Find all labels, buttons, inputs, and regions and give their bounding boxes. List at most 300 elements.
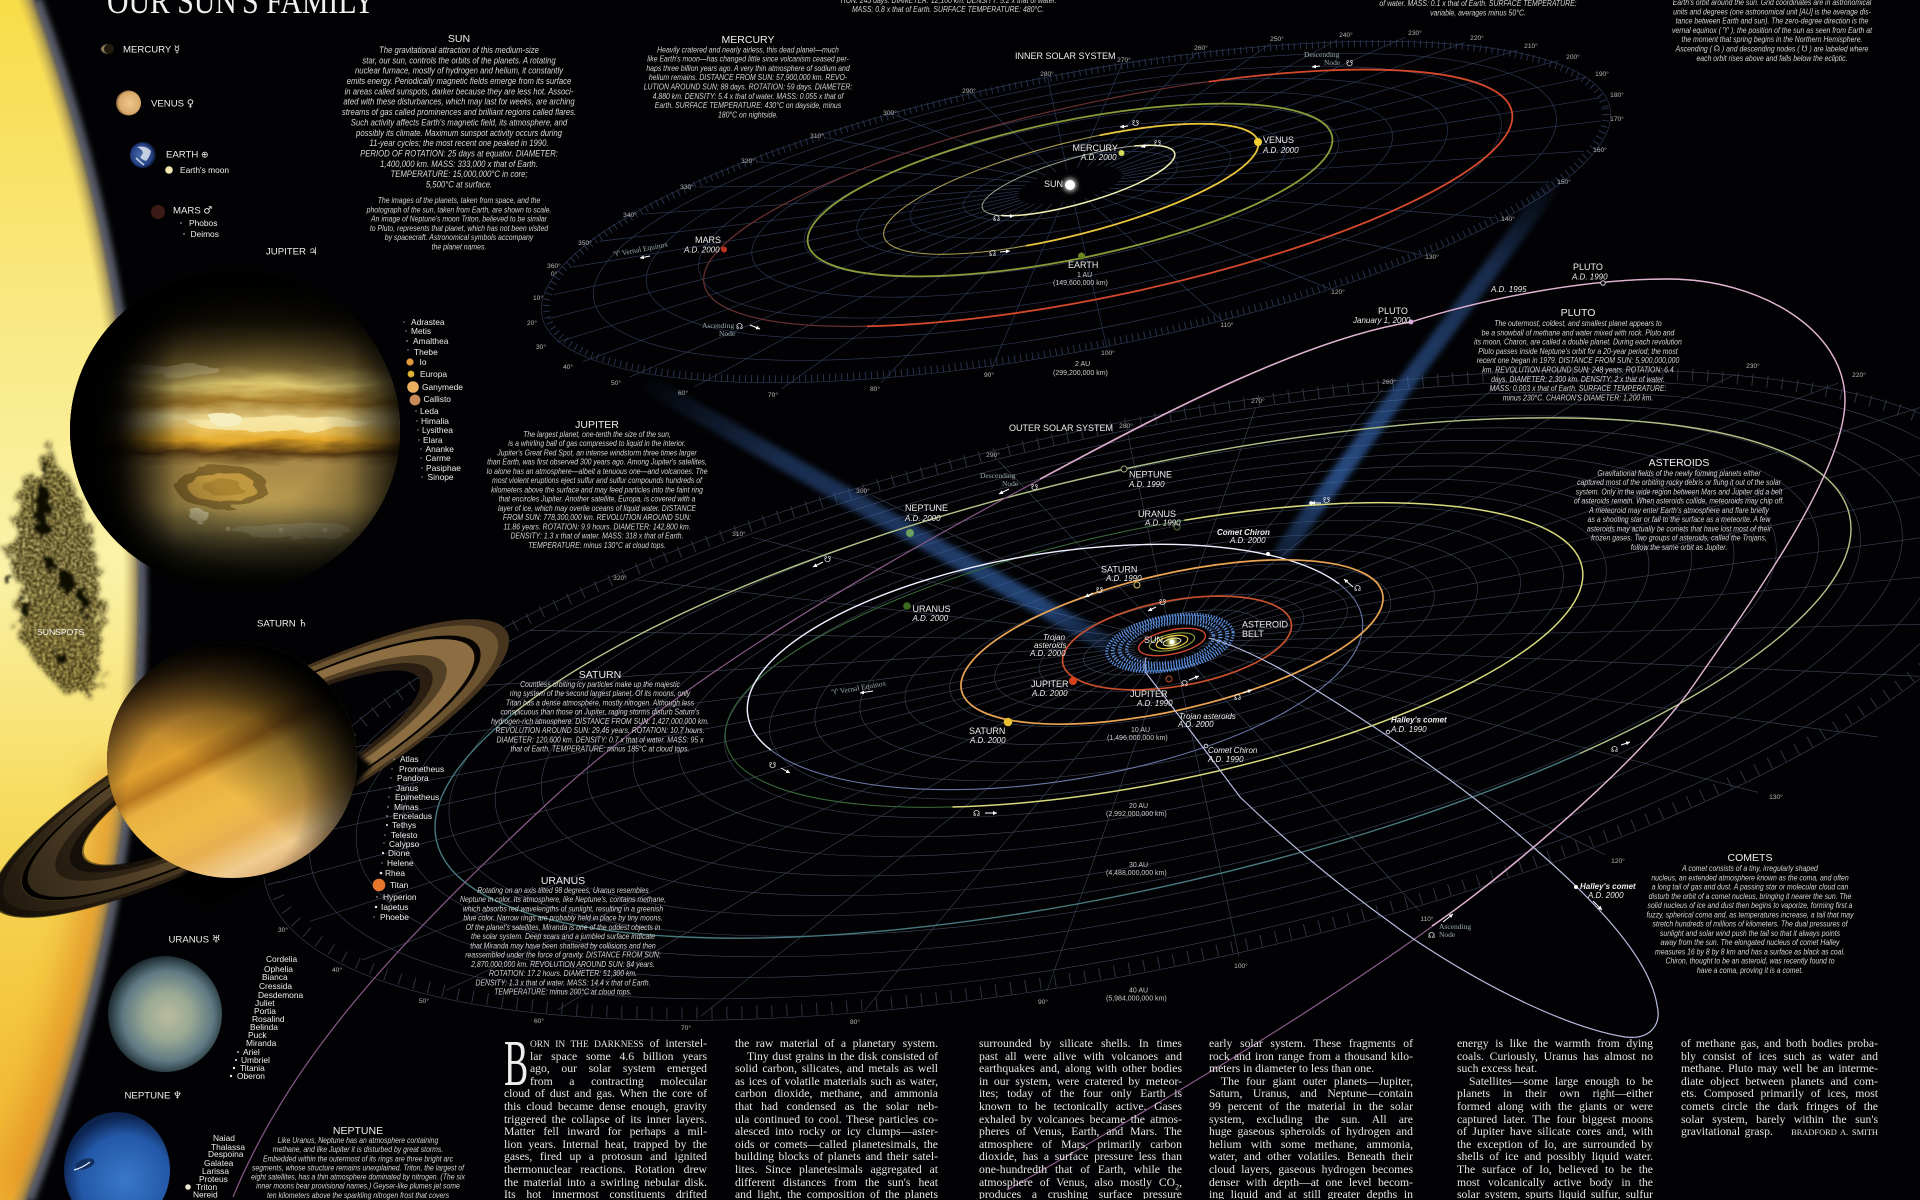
text: neptune [251, 1125, 466, 1200]
article column 1: thermonuclear reactions. Rotation drew [504, 1163, 707, 1176]
article column 1: ago, our solar system emerged [530, 1062, 707, 1075]
article column 5: most volcanically active body in the [1457, 1176, 1653, 1189]
text: venus (cropped) [839, 0, 1057, 14]
inner system labels: MARS [695, 235, 721, 245]
text: sun: Such activity affects Earth's magnetic field, its atmosphere, and [351, 117, 568, 128]
outer system labels: ☋ [1159, 598, 1166, 607]
text: comets: Chiron, thought to be an asteroid, was recently found to [1665, 956, 1835, 966]
article column 1 [504, 1038, 707, 1199]
inner system labels: ♈︎ Vernal Equinox [613, 240, 669, 259]
outer system degree labels: 90° [1038, 998, 1048, 1006]
text: sun: possibly its climate. Maximum sunspot activity occurs during [355, 127, 562, 138]
outer system labels: BELT [1242, 629, 1264, 639]
article column 3 [979, 1038, 1182, 1199]
text: uranus: the solar system. Deep scars and a jumbled surface indicate [471, 932, 655, 941]
miniature inner orbits and sun at outer-system centre [1132, 619, 1212, 665]
article column 4: meters in diameter to less than one. [1209, 1062, 1374, 1075]
outer system labels: 40 AU [1129, 988, 1148, 994]
inner system degree labels: 250° [1270, 35, 1284, 43]
outer system labels: Node [1002, 479, 1019, 488]
article column 1: this cloud became dense enough, gravity [504, 1100, 707, 1113]
text: uranus: which absorbs red wavelengths of sunlight, resulting in a greenish [463, 904, 663, 914]
saturn moons list: Rhea [385, 868, 405, 878]
inner system degree labels: 270° [1117, 56, 1131, 64]
article column 2: oids or comets—called planetesimals, the [735, 1138, 938, 1151]
text: sun: in areas called sunspots, darker because they are less hot. Associ- [345, 86, 574, 97]
text: sun: emits energy. Periodically magnetic fields emerge from its surface [347, 75, 572, 86]
planet: mercury [101, 44, 114, 54]
outer system labels: (2,992,000,000 km) [1106, 811, 1167, 818]
text: sun: 11-year cycles; the most recent one peaked in 1990. [369, 137, 549, 148]
neptune moons list: Naiad [213, 1133, 235, 1143]
outer system labels: A.D. 2000 [1229, 536, 1266, 545]
inner system labels: Node [719, 329, 736, 338]
planet name labels: JUPITER ♃ [266, 246, 318, 258]
text: asteroids: captured most of the orbiting rocky debris or flung it out of the solar [1577, 478, 1781, 487]
text: grid explanation [1672, 0, 1873, 63]
outer system labels: ☊ [1611, 745, 1618, 754]
text: uranus: Neptune in color. Its atmosphere, like Neptune's, contains methane, [460, 895, 666, 904]
inner system degree labels: 210° [1524, 42, 1538, 50]
article column 2: that had condensed as the solar neb- [735, 1100, 938, 1113]
planet: earth [130, 142, 156, 168]
jupiter moons list: Elara [423, 435, 443, 445]
orbit: mercury [976, 131, 1181, 230]
text: comets: disturb the orbit of a comet nucleus, bringing it nearer the sun. The [1649, 891, 1851, 901]
outer system labels: ASTEROID [1242, 620, 1289, 630]
outer system labels: 20 AU [1129, 803, 1148, 810]
neptune moons list: Despoina [208, 1149, 244, 1159]
text: comets: A comet consists of a tiny, irregularly shaped [1681, 863, 1819, 873]
article column 4: system, excluding the sun. All are [1209, 1113, 1413, 1126]
sunspots [4, 440, 102, 695]
article column 4 [1209, 1038, 1413, 1199]
outer system labels: PLUTO [1378, 306, 1408, 316]
article column 6 [1681, 1038, 1878, 1138]
outer system labels: A.D. 2000 [1031, 689, 1068, 698]
article column 5: coals. Curiously, Uranus has almost no [1457, 1050, 1653, 1063]
outer system labels: ☋ [769, 761, 776, 770]
article column 2 [735, 1038, 938, 1199]
article column 5: captured later. The four biggest moons [1457, 1113, 1653, 1126]
neptune moons list: Nereid [193, 1190, 218, 1200]
text: neptune: NEPTUNE [333, 1125, 383, 1137]
light beam linking inner system to outer system [640, 175, 1560, 645]
earth's moon [165, 166, 173, 174]
article column 6: solar system, barely within the sun's [1681, 1113, 1878, 1126]
article column 1: Matter fell inward for perhaps a mil- [504, 1125, 707, 1138]
sun limb [0, 0, 140, 1200]
neptune moons list: Larissa [202, 1166, 229, 1176]
text: asteroids: system. Only in the wide region between Mars and Jupiter did a belt [1576, 487, 1783, 497]
text: pluto: be a snowball of methane and water mixed with rock. Pluto and [1482, 328, 1675, 337]
inner system degree labels [527, 29, 1624, 399]
inner system degree labels: 220° [1470, 34, 1484, 42]
uranus moons list: Umbriel [241, 1055, 270, 1065]
jupiter moons list: Thebe [414, 347, 438, 357]
saturn moons list: Enceladus [393, 811, 432, 821]
orbit: earth [794, 69, 1346, 311]
inner system labels: ☋ [1154, 139, 1161, 148]
article column 5: Satellites—some large enough to be [1469, 1075, 1653, 1088]
outer system labels: ☊ [1234, 693, 1241, 702]
planet name labels: EARTH ⊕ [166, 150, 209, 160]
saturn moons list: Iapetus [381, 902, 408, 912]
outer system degree labels: 130° [1769, 793, 1783, 801]
planet name labels: Phobos [189, 218, 217, 228]
text: uranus: Of the planet's satellites, Miranda is one of the oddest objects in [466, 922, 660, 932]
article column 2: carbon dioxide, methane, and ammonia [735, 1087, 938, 1100]
inner system planets [721, 138, 1262, 260]
inner system labels: 2 AU [1075, 361, 1090, 368]
outer system labels: ☋ [1096, 586, 1103, 595]
inner system degree labels: 150° [1557, 178, 1571, 186]
text: comets: away from the sun. The elongated nucleus of comet Halley [1661, 938, 1841, 947]
text: neptune: ten kilometers above the sparkling nitrogen frost that covers [267, 1190, 449, 1200]
saturn moons list: Helene [387, 858, 414, 868]
inner system labels: VENUS [1263, 135, 1294, 145]
uranus moons list: Titania [240, 1063, 265, 1073]
text: asteroids: Gravitational fields of the newly forming planets either [1597, 468, 1761, 478]
text: neptune: Like Uranus, Neptune has an atmosphere containing [278, 1135, 439, 1145]
outer system degree labels: 290° [986, 451, 1000, 459]
text: uranus: TEMPERATURE: minus 200°C at cloud tops. [494, 987, 632, 997]
article column 6: ets. Composed primarily of ices, most [1681, 1087, 1878, 1100]
article column 4: huge gaseous spheroids of hydrogen and [1209, 1125, 1413, 1138]
uranus moons list: Bianca [262, 972, 288, 982]
outer system labels: A.D. 1990 [1571, 272, 1608, 282]
neptune moons list: Proteus [199, 1174, 228, 1184]
text: saturn: DIAMETER: 120,600 km. DENSITY: 0.7 x that of water. MASS: 95 x [496, 735, 705, 745]
jupiter moons list: Lysithea [422, 425, 453, 435]
outer system labels: ☊ [1181, 679, 1188, 688]
neptune moons list: Galatea [204, 1158, 234, 1168]
text: pluto: MASS: 0.003 x that of Earth. SURFACE TEMPERATURE: [1490, 383, 1666, 393]
uranus moons list: Miranda [246, 1038, 277, 1048]
outer system degree labels: 50° [419, 997, 429, 1005]
article column 6: gravitational grasp. BRADFORD A. SMITH [1681, 1125, 1878, 1138]
jupiter moons list: Sinope [428, 472, 454, 482]
saturn moons list: Janus [396, 783, 418, 793]
outer system labels: A.D. 2000 [904, 514, 941, 523]
text: jupiter: than Earth, was first observed 300 years ago. Among Jupiter's satellites, [487, 457, 707, 467]
text: grid explanation: vernal equinox ( ♈︎ ), the position of the sun as seen from Earth at [1672, 25, 1872, 35]
inner system labels: A.D. 2000 [1262, 146, 1299, 155]
outer system labels: 30 AU [1129, 862, 1148, 869]
saturn moons list: Pandora [397, 773, 429, 783]
text: mercury [644, 34, 852, 120]
outer system labels: ☊ [1354, 584, 1361, 593]
inner system labels [613, 50, 1353, 377]
article column 2: as ices of volatile materials such as water, [735, 1075, 938, 1088]
text: sun: by spacecraft. Astronomical symbols accompany [385, 233, 534, 242]
neptune moons list [185, 1133, 245, 1200]
orbit: pluto [233, 279, 1845, 1197]
saturn rings [0, 576, 533, 960]
text: neptune: methane, and like Jupiter it is disturbed by great storms. [273, 1144, 443, 1154]
text: asteroids [1574, 457, 1784, 552]
planet name labels: SUNSPOTS [37, 627, 85, 637]
text: uranus [460, 875, 666, 997]
orbit: halley's comet [1145, 634, 1658, 1037]
article column 2: alesced into rocky or icy clumps—aster- [735, 1125, 938, 1138]
outer system degree labels: 110° [1420, 915, 1434, 923]
jupiter moons list: Io [420, 357, 427, 367]
outer system degree labels: 220° [1852, 371, 1866, 379]
text: jupiter: layer of ice, which may overlie oceans of liquid water. DISTANCE [498, 503, 697, 513]
inner system degree labels: 60° [678, 389, 688, 397]
outer system labels: Ascending [1439, 922, 1471, 931]
outer system labels: URANUS [912, 604, 951, 614]
outer system degree labels: 230° [1746, 362, 1760, 370]
outer system labels: NEPTUNE [1129, 470, 1172, 480]
inner system degree labels: 20° [527, 319, 537, 327]
inner system degree labels: 280° [1040, 70, 1054, 78]
orbit: comet chiron [730, 506, 1380, 828]
text: saturn: that of Earth. TEMPERATURE: minus 185°C at cloud tops. [511, 744, 689, 754]
outer system degree labels: 280° [1119, 422, 1133, 430]
outer system labels: (5,984,000,000 km) [1106, 996, 1167, 1002]
text: pluto: days. DIAMETER: 2,300 km. DENSITY: 2 x that of water. [1491, 374, 1665, 384]
planet name labels: MERCURY ☿ [123, 44, 180, 56]
text: saturn: conspicuous than those on Jupiter, raging storms disturb Saturn's [500, 707, 700, 717]
jupiter moons list: Ananke [426, 444, 454, 454]
outer system labels: ☋ [1323, 496, 1330, 505]
article column 3: pheres of Venus, Earth, and Mars. The [979, 1125, 1182, 1138]
article column 6: diate object between planets and com- [1681, 1075, 1878, 1088]
text: sun: to Pluto, represents that planet, which has not been visited [370, 223, 549, 233]
inner system labels: ☋ [1346, 59, 1353, 68]
inner system degree labels: 300° [883, 109, 897, 117]
text: neptune: eight satellites, has a thin atmosphere dominated by nitrogen. (The six [251, 1172, 466, 1182]
text: uranus: URANUS [541, 875, 585, 887]
inner system degree labels: 260° [1194, 44, 1208, 52]
outer system labels: 10 AU [1131, 727, 1150, 734]
jupiter moons list: Metis [411, 326, 431, 336]
planet name labels: Earth's moon [180, 165, 229, 175]
inner system labels: ☊ [993, 214, 1000, 223]
text: grid explanation: units and degrees (one astronomical unit [AU] is the average dis- [1673, 7, 1871, 16]
outer system labels: A.D. 2000 [1177, 720, 1214, 729]
saturn moons list: Dione [388, 848, 410, 858]
article column 2: lites. Since planetesimals aggregated at [735, 1163, 938, 1176]
outer system labels: Halley's comet [1580, 882, 1636, 891]
text: pluto: The outermost, coldest, and smallest planet appears to [1494, 318, 1662, 328]
uranus moons list: Belinda [250, 1022, 278, 1032]
outer system labels: ♈︎ Vernal Equinox [831, 678, 887, 697]
outer system labels: Descending [980, 471, 1016, 480]
jupiter moons list: Amalthea [413, 336, 449, 346]
inner system degree labels: 110° [1220, 321, 1234, 329]
outer system labels: Comet Chiron [1208, 746, 1258, 755]
text: jupiter [486, 419, 708, 550]
text: asteroids: A meteoroid may enter Earth's atmosphere and flare briefly [1588, 505, 1770, 515]
text: mercury: Heavily cratered and nearly airless, this dead planet—much [657, 45, 839, 54]
outer system labels: A.D. 1990 [1128, 480, 1165, 489]
outer system labels: JUPITER [1130, 689, 1168, 699]
article column 1: from a contracting molecular [530, 1075, 707, 1088]
saturn moons list: Epimetheus [395, 792, 439, 802]
text: grid explanation: Ascending ( ☊ ) and descending nodes ( ☋ ) are labeled where [1676, 44, 1868, 54]
text: sun: streams of gas called prominences and brilliant regions called flares. [342, 106, 576, 117]
inner system labels: 1 AU [1077, 272, 1092, 279]
text: asteroids: ASTEROIDS [1649, 457, 1709, 469]
article column 2: ula continued to cool. These particles co- [735, 1113, 938, 1126]
article column 5: The surface of Io, believed to be the [1457, 1163, 1653, 1176]
text: mercury: 180°C on nightside. [718, 110, 778, 120]
text: uranus: DENSITY: 1.3 x that of water. MASS: 14.4 x that of Earth. [475, 978, 651, 988]
text: grid explanation: each orbit rises above and falls below the ecliptic. [1696, 53, 1848, 63]
outer system labels: A.D. 1990 [1207, 755, 1244, 764]
text: mercury: helium remains. DISTANCE FROM SUN: 57,900,000 km. REVO- [649, 73, 848, 82]
inner system degree labels: 0° [551, 270, 558, 278]
inner system degree labels: 30° [536, 343, 546, 351]
text: comets: have a coma, proving it is a comet. [1697, 965, 1803, 975]
inner system degree labels: 240° [1339, 31, 1353, 39]
inner system labels: (149,600,000 km) [1053, 280, 1108, 287]
inner system degree labels: 120° [1331, 288, 1345, 296]
outer system labels: Node [1439, 930, 1456, 939]
jupiter moons list [403, 317, 463, 482]
inner system labels: EARTH [1068, 260, 1098, 270]
uranus moons list: Rosalind [252, 1014, 285, 1024]
text: jupiter: most violent eruptions eject sulfur and sulfur compounds hundreds of [492, 476, 703, 485]
jupiter moons list: Adrastea [411, 317, 445, 327]
article column 1: lion years. Internal heat, trapped by the [504, 1138, 707, 1151]
outer solar system grid [208, 242, 1920, 1148]
outer system labels: ☋ [824, 555, 831, 564]
outer system degree labels: 120° [1611, 857, 1625, 865]
article column 4: denser with depth—at one level becom- [1209, 1176, 1413, 1189]
text: uranus: reassembled under the force of gravity. DISTANCE FROM SUN: [465, 950, 661, 960]
ring shadow [170, 745, 372, 905]
text: mars (cropped): variable, averages minus 50°C. [1430, 8, 1526, 18]
article column 5: formed along with the giants or were [1457, 1100, 1653, 1113]
text: comets: stretch hundreds of millions of kilometers. The dual pressures of [1652, 919, 1848, 929]
text: jupiter: kilometers above the surface and may feed particles into the faint ring [491, 485, 704, 495]
text: mars (cropped) [1379, 0, 1577, 18]
outer system labels: Trojan asteroids [1179, 712, 1236, 721]
article column 3: dioxide, has a surface pressure less than [979, 1150, 1182, 1163]
text: saturn [491, 669, 709, 754]
text: saturn: hydrogen-rich atmosphere. DISTANCE FROM SUN: 1,427,000,000 km. [491, 716, 709, 726]
text: sun: The images of the planets, taken from space, and the [378, 195, 540, 205]
text: mercury: like Earth's moon—has changed little since volcanism ceased per- [647, 54, 849, 64]
outer system labels: SATURN [1101, 564, 1137, 574]
planet name labels: VENUS ♀ [151, 98, 194, 110]
inner system labels: ☊ [989, 249, 996, 258]
inner system degree labels: 180° [1610, 91, 1624, 99]
text: saturn: REVOLUTION AROUND SUN: 29.46 years. ROTATION: 10.7 hours. [496, 726, 704, 735]
outer system labels: ☋ [1031, 483, 1038, 492]
uranus moons list: Desdemona [258, 990, 304, 1000]
outer system labels: SUN [1144, 635, 1163, 645]
text: comets: measures 16 by 8 by 8 km and has a surface as black as coal. [1655, 947, 1845, 957]
inner system labels: INNER SOLAR SYSTEM [1015, 51, 1116, 61]
article column 3: ites; today of the four only Earth is [979, 1087, 1182, 1100]
text: jupiter: JUPITER [575, 419, 619, 431]
outer system labels: Comet Chiron [1217, 528, 1270, 537]
article column 1: gases, fired up a protosun and ignited [504, 1150, 707, 1163]
article column 3: atmosphere of Venus, also mostly CO2, [979, 1176, 1182, 1191]
outer system degree labels: 30° [278, 926, 288, 934]
outer system labels [769, 262, 1636, 1002]
uranus moons list: Cordelia [266, 954, 298, 964]
text: mercury: LUTION AROUND SUN: 88 days. ROTATION: 59 days. DIAMETER: [644, 82, 852, 92]
outer system degree labels: 260° [1382, 378, 1396, 386]
uranus moons list: Puck [248, 1030, 267, 1040]
outer system labels: A.D. 2000 [969, 736, 1006, 745]
text: sun: the planet names. [432, 242, 486, 252]
text: mercury: Earth. SURFACE TEMPERATURE: 430°C on dayside, minus [655, 100, 841, 110]
inner solar system grid [516, 0, 1636, 451]
uranus moons list: Juliet [255, 998, 275, 1008]
text: saturn: Countless orbiting icy particles make up the majestic [520, 679, 680, 689]
orbit: venus [873, 97, 1269, 281]
outer system labels: A.D. 1990 [1136, 699, 1173, 708]
outer system labels: (1,496,000,000 km) [1107, 735, 1168, 742]
article column 1: the material into a swirling nebular disk. [504, 1176, 707, 1189]
inner system degree labels: 10° [533, 294, 543, 302]
text: sun: SUN [448, 33, 470, 45]
planet: neptune [64, 1112, 170, 1200]
text: neptune: segments, whose structure remains unexplained. Triton, the largest of [252, 1163, 465, 1173]
article column 1: triggered the collapse of its inner layers. [504, 1113, 707, 1126]
text: sun: TEMPERATURE: 15,000,000°C in core; [390, 168, 528, 179]
text: pluto: PLUTO [1561, 307, 1595, 319]
text: sun: nuclear furnace, mostly of hydrogen and helium, it constantly [355, 65, 564, 76]
text: uranus: 2,870,000,000 km. REVOLUTION AROUND SUN: 84 years. [470, 959, 655, 969]
planet name labels: URANUS ♅ [168, 934, 221, 946]
neptune moons list: Thalassa [211, 1142, 245, 1152]
article column 4: water, and other volatiles. Beneath their [1209, 1150, 1413, 1163]
text: uranus: that Miranda may have been shattered by collisions and then [470, 941, 656, 951]
outer system labels: URANUS [1138, 509, 1176, 519]
text: asteroids: follow the same orbit as Jupiter. [1631, 542, 1727, 552]
text: jupiter: that encircles Jupiter. Another satellite, Europa, is covered with a [499, 494, 695, 504]
planet: venus [116, 90, 141, 116]
planet name labels: SATURN ♄ [257, 618, 307, 630]
outer system degree labels: 100° [1234, 962, 1248, 970]
neptune moons list: Triton [196, 1182, 217, 1192]
outer system labels: asteroids [1034, 641, 1066, 650]
article column 1: cloud of dust and gas. When the core of [504, 1087, 707, 1100]
inner system labels: A.D. 2000 [683, 246, 720, 254]
text: sun: PERIOD OF ROTATION: 25 days at equator. DIAMETER: [360, 148, 558, 159]
inner system degree labels: 70° [768, 391, 778, 399]
outer system degree labels: 310° [732, 530, 746, 538]
outer system labels: A.D. 1990 [1144, 518, 1181, 528]
inner system labels: Descending [1304, 50, 1340, 59]
outer system labels: OUTER SOLAR SYSTEM [1009, 423, 1113, 433]
orbit: uranus [700, 443, 1608, 867]
orbit: mars [684, 17, 1532, 379]
saturn moons list: Tethys [392, 820, 416, 830]
outer system planet markers [903, 281, 1605, 889]
text: pluto: minus 230°C. CHARON'S DIAMETER: 1,200 km. [1503, 393, 1653, 403]
text: sun: An image of Neptune's moon Triton, believed to be similar [370, 214, 547, 224]
saturn moons list: Hyperion [383, 892, 417, 902]
saturn moons list: Prometheus [399, 764, 444, 774]
outer system labels: Trojan [1043, 633, 1066, 642]
uranus moons list: Portia [254, 1006, 276, 1016]
outer system labels: A.D. 1995 [1490, 285, 1527, 294]
outer system labels: A.D. 2000 [1587, 891, 1624, 900]
text: uranus: blue color. Narrow rings are probably held in place by tiny moons. [463, 913, 663, 923]
text: sun [342, 33, 576, 252]
inner system degree labels: 290° [962, 87, 976, 95]
text: jupiter: 11.86 years. ROTATION: 9.9 hours. DIAMETER: 142,800 km. [503, 522, 691, 532]
